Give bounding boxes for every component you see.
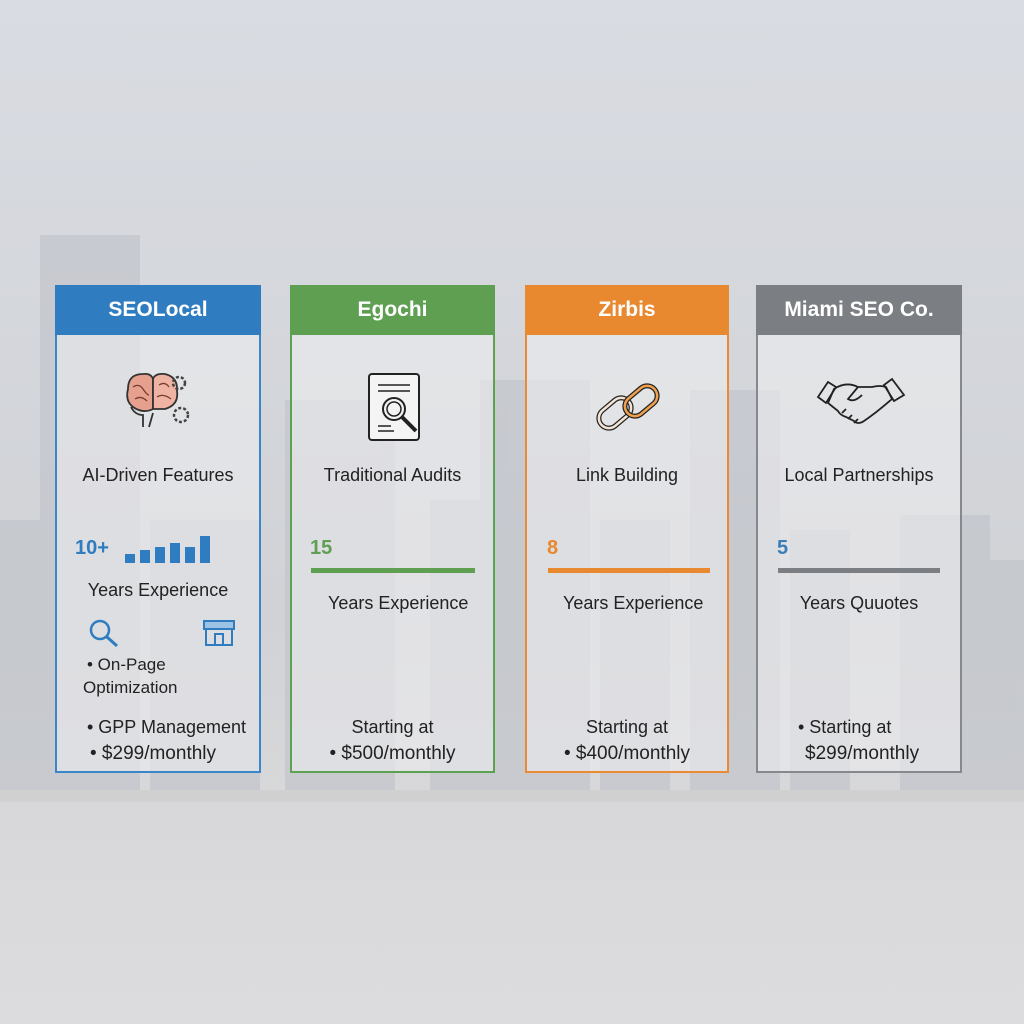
text: price: $299/monthly (805, 743, 919, 764)
text: On-Page Optimization: • On-Page (87, 655, 166, 674)
text: Years Experience: Years Experience (563, 593, 703, 613)
text: price: • $500/monthly (329, 743, 456, 764)
heading: Egochi: Egochi (357, 298, 428, 321)
text: Years Experience: Years Experience (328, 593, 468, 613)
chart: bars (125, 536, 210, 563)
text: price: • $400/monthly (564, 743, 690, 764)
heading: SEOLocal (55, 285, 261, 335)
stat: 15: 15 (310, 537, 332, 559)
text: price: • $299/monthly (90, 743, 216, 764)
icon: document with magnifier (368, 373, 420, 441)
stat: 10+: 10+ (75, 537, 109, 559)
heading: Miami SEO Co. (756, 285, 962, 335)
heading: Zirbis: Zirbis (598, 298, 656, 321)
stat: 5: 5 (777, 537, 788, 559)
icon: magnifier (90, 620, 118, 647)
heading: Egochi (290, 285, 495, 335)
bar: green (311, 568, 475, 573)
icon: store (203, 620, 235, 646)
icon: chain link (596, 383, 660, 431)
heading: SEOLocal: SEOLocal (108, 298, 208, 321)
bar: orange (548, 568, 710, 573)
text: Starting at: • Starting at (798, 717, 891, 737)
icon: handshake (816, 378, 906, 424)
text: On-Page Optimization: Optimization (83, 678, 177, 697)
text: On-Page Optimization (83, 655, 177, 697)
bar: gray (778, 568, 940, 573)
heading: Zirbis (525, 285, 729, 335)
text: Link Building: Link Building (576, 465, 678, 485)
text: Local Partnerships: Local Partnerships (784, 465, 934, 485)
panel: SEOLocal (55, 285, 261, 773)
panel: Miami SEO Co. (756, 285, 962, 773)
text: Traditional Audits: Traditional Audits (324, 465, 461, 485)
text: Starting at: Starting at (351, 717, 434, 737)
text: Starting at: Starting at (586, 717, 668, 737)
text: Years Experience: Years Experience (88, 580, 228, 600)
icon: brain with gears (126, 373, 190, 428)
text: AI-Driven Features: AI-Driven Features (82, 465, 234, 485)
text: Years Quuotes: Years Quuotes (800, 593, 918, 613)
panel: Zirbis (525, 285, 729, 773)
heading: Miami SEO Co.: Miami SEO Co. (784, 298, 934, 321)
panel: Egochi (290, 285, 495, 773)
stat: 8: 8 (547, 537, 558, 559)
text: GPP Management: • GPP Management (87, 717, 246, 737)
